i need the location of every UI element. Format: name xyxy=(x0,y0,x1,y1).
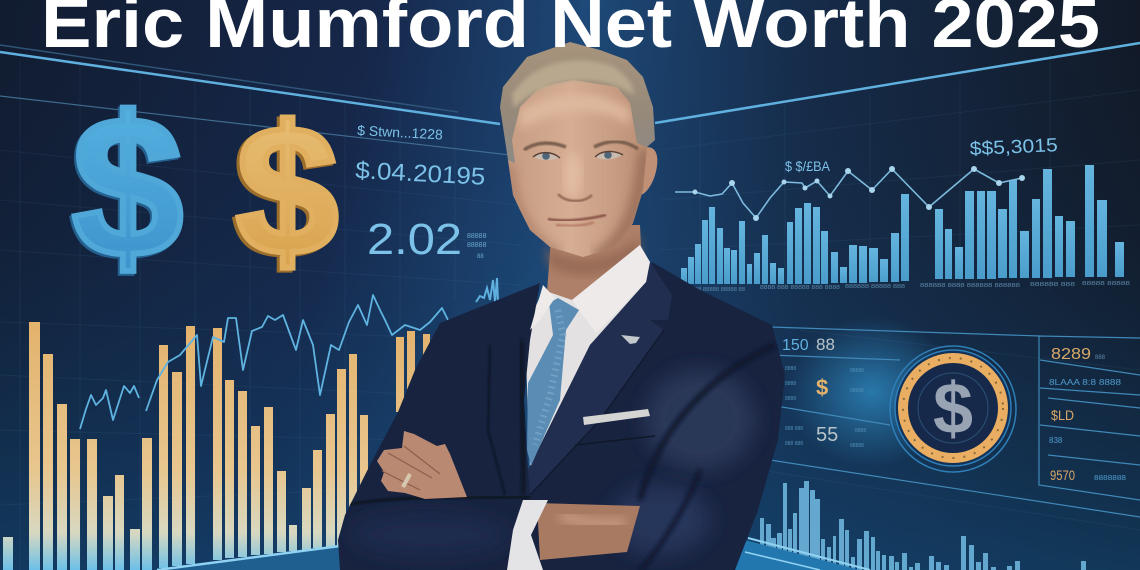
lower left stats xyxy=(782,335,866,449)
right trend line with markers xyxy=(675,166,1025,221)
right panel figures: $$5,3015 xyxy=(969,135,1058,160)
forearm highlight xyxy=(560,515,625,524)
left panel figures: $ Stwn...1228 xyxy=(357,122,443,142)
lower left stats: 8888 xyxy=(785,381,796,387)
lower right data box text xyxy=(1049,346,1126,483)
eyes xyxy=(533,151,623,160)
right axis labels: 88888 88888 xyxy=(1082,281,1130,287)
icon: coin with dollar sign xyxy=(890,346,1016,472)
lower right dashboard lines xyxy=(770,327,1140,517)
right panel figures: $ $/£BA xyxy=(785,158,831,174)
face xyxy=(508,70,647,257)
suit shading xyxy=(345,340,775,570)
left panel figures: 88888 xyxy=(467,233,487,240)
neck xyxy=(547,225,642,330)
lower left stats: 888 888 xyxy=(785,441,803,447)
pocket square xyxy=(583,409,650,425)
right axis labels: 888888 888 xyxy=(1030,282,1075,288)
right axis labels: 8888 888 88888 888 8888 xyxy=(760,285,840,291)
hair highlight xyxy=(512,60,634,108)
left panel figures xyxy=(355,122,487,264)
lower left stats: 88888 xyxy=(850,368,864,374)
icon: blue dollar sign: $ xyxy=(72,76,183,299)
cheek and jaw shading xyxy=(510,95,645,258)
lower right data box text: 8LAAA 8:8 8888 xyxy=(1049,378,1122,387)
tie xyxy=(527,298,579,466)
collar xyxy=(530,245,650,333)
right axis labels: 888888 88888 888 xyxy=(845,284,905,290)
lapel edge xyxy=(530,330,664,495)
lower left stats: 8888 xyxy=(785,366,796,372)
left base platform xyxy=(157,546,345,570)
lower right base platform xyxy=(735,538,870,570)
brows xyxy=(524,142,638,150)
lower left stats: 88 xyxy=(816,335,835,354)
lower left stats: 150 xyxy=(782,337,809,354)
lapel xyxy=(528,262,672,495)
hair xyxy=(500,42,655,163)
lower left stats: 8888 xyxy=(785,396,796,402)
suit jacket xyxy=(338,262,785,570)
person xyxy=(338,42,785,570)
cuff xyxy=(507,500,548,570)
left panel frame lines xyxy=(0,45,510,155)
lower right data box text: 838 xyxy=(1049,436,1063,445)
shirt xyxy=(525,245,652,470)
lower right bar chart xyxy=(760,481,1086,570)
left panel figures: 88 xyxy=(477,254,484,260)
lower left stats: $ xyxy=(816,375,828,400)
lower right data box text: 8289 xyxy=(1051,346,1091,363)
pocket line xyxy=(575,436,655,445)
hand xyxy=(377,431,467,499)
right axis labels xyxy=(685,281,1130,293)
left trend line xyxy=(80,295,448,429)
ear xyxy=(638,147,657,195)
lower right data box text: 9570 xyxy=(1050,467,1075,483)
lower left stats: 88888 xyxy=(850,443,864,449)
lower right data box text: $LD xyxy=(1051,407,1074,423)
nose xyxy=(558,194,592,201)
forearm xyxy=(537,503,640,560)
lower left stats: 55 xyxy=(816,424,838,446)
neck shadow xyxy=(545,235,640,275)
tie texture xyxy=(535,310,563,445)
lapel pin xyxy=(621,335,640,344)
mouth xyxy=(548,215,606,220)
left panel figures: 2.02 xyxy=(367,215,462,264)
right axis labels: 888888 8888 888888 888888 xyxy=(920,283,1020,289)
gold bar chart xyxy=(3,322,430,570)
small spark chart xyxy=(476,278,498,302)
lower left stats: 888 888 xyxy=(785,426,803,432)
icon: coin with dollar sign: $ xyxy=(933,369,973,449)
right panel figures xyxy=(785,135,1058,174)
right panel frame line xyxy=(655,43,1140,123)
lower lip xyxy=(556,222,594,226)
ring xyxy=(403,474,410,487)
lower right data box text: 8888888 xyxy=(1094,475,1126,482)
left panel figures: 88888 xyxy=(467,242,487,249)
left panel figures: $.04.20195 xyxy=(355,157,486,191)
lower left stats: 8888 xyxy=(855,428,866,434)
right axis labels: 88888 88888 88888 88 xyxy=(685,287,745,293)
right bar chart xyxy=(681,165,1124,284)
lower left stats: 88888 xyxy=(850,388,864,394)
lower right data box text: 888 xyxy=(1095,355,1106,361)
icon: gold dollar sign: $ xyxy=(233,89,335,295)
icon: blue dollar sign: $ xyxy=(70,78,181,301)
icon: gold dollar sign: $ xyxy=(236,87,338,293)
